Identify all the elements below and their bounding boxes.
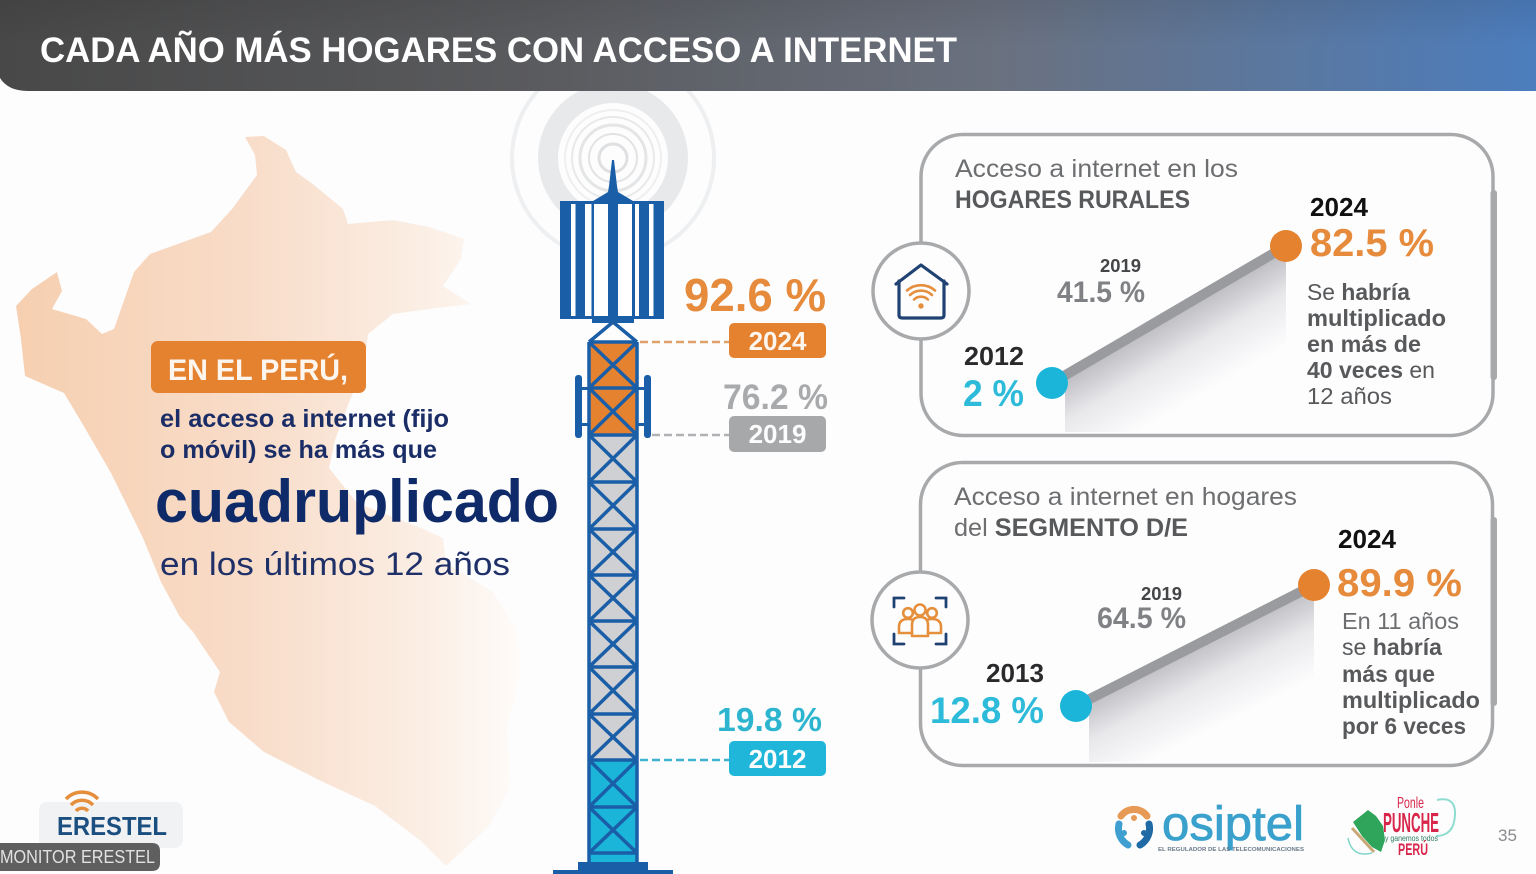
data 2019: 2019 — [1141, 583, 1182, 604]
card heading: Acceso a internet en los — [955, 155, 1238, 183]
rural note — [1307, 279, 1446, 409]
logo: Erestel: ERESTEL — [57, 811, 167, 841]
level marker 2019: 76.2 % — [723, 378, 828, 417]
level marker 2012: 2012 — [749, 744, 806, 774]
logo: Osiptel: osiptel — [1162, 798, 1304, 851]
panel: D/E segment households — [872, 462, 1497, 766]
icon: wifi house — [873, 243, 969, 339]
data 2012 — [963, 341, 1024, 414]
card heading: Acceso a internet en hogares — [954, 483, 1297, 511]
intro text line 2: o móvil) se ha más que — [160, 436, 437, 464]
level marker 2024: 92.6 % — [684, 269, 826, 321]
data 2019: 2019 — [1100, 255, 1141, 276]
badge: en el Perú — [151, 341, 366, 393]
card frame — [921, 134, 1497, 436]
data 2024: 89.9 % — [1337, 562, 1462, 605]
panel: rural households — [873, 134, 1497, 436]
badge: en el Perú: EN EL PERÚ, — [168, 353, 348, 387]
data 2013 — [930, 658, 1044, 731]
level marker 2012 — [640, 701, 826, 776]
intro text: el acceso a internet (fijo — [160, 405, 449, 433]
title: CADA AÑO MÁS HOGARES CON ACCESO A INTERNET — [40, 30, 957, 70]
signal rings — [512, 57, 714, 259]
level marker 2024 — [640, 269, 826, 358]
highlighted word: cuadruplicado — [155, 468, 559, 535]
tower lattice — [589, 342, 637, 864]
level marker 2019: 2019 — [749, 419, 806, 449]
data 2013: 12.8 % — [930, 690, 1044, 731]
card heading: del SEGMENTO D/E — [954, 514, 1188, 542]
data 2019 — [1097, 583, 1186, 635]
data 2024: 2024 — [1338, 524, 1397, 554]
data 2024 — [1337, 524, 1462, 605]
logo: Osiptel: EL REGULADOR DE LAS TELECOMUNICACIONES — [1158, 847, 1304, 853]
level marker 2012: 19.8 % — [717, 701, 822, 738]
viewer name tag: MONITOR ERESTEL — [0, 846, 155, 867]
data 2024: 82.5 % — [1310, 222, 1434, 265]
level marker 2019 — [652, 378, 828, 452]
data 2024: 2024 — [1310, 192, 1369, 222]
logo: Ponle Punche Perú: PUNCHE — [1383, 807, 1439, 838]
segment note: multiplicado — [1342, 687, 1480, 713]
segment note: se habría — [1342, 634, 1442, 660]
logo: Ponle Punche Perú: y ganemos todos — [1385, 834, 1438, 843]
rural note: en más de — [1307, 331, 1421, 357]
viewer name tag — [0, 843, 160, 871]
data 2019: 64.5 % — [1097, 602, 1186, 635]
data 2019 — [1057, 255, 1145, 309]
logo: Ponle Punche Perú — [1348, 795, 1455, 859]
level marker 2024: 2024 — [749, 326, 807, 356]
data 2024 — [1310, 192, 1434, 265]
tower base — [553, 862, 673, 874]
logo: Erestel — [39, 792, 183, 848]
trend chart — [1036, 230, 1302, 432]
rural note: multiplicado — [1307, 305, 1446, 331]
telecom tower — [553, 160, 673, 874]
card heading — [955, 155, 1238, 214]
logo: Ponle Punche Perú: Ponle — [1397, 795, 1424, 812]
left message block — [151, 341, 559, 582]
data 2012: 2012 — [964, 341, 1024, 371]
rural note: 12 años — [1307, 383, 1392, 409]
rural note: 40 veces en — [1307, 357, 1435, 383]
osiptel emblem — [1118, 809, 1150, 845]
card heading — [954, 483, 1297, 542]
card heading: HOGARES RURALES — [955, 186, 1190, 214]
map of Peru — [16, 136, 520, 866]
trend chart — [1060, 569, 1330, 762]
logo: Ponle Punche Perú: PERÚ — [1398, 840, 1428, 859]
closing text: en los últimos 12 años — [160, 546, 510, 582]
page number: 35 — [1498, 826, 1517, 845]
segment note: por 6 veces — [1342, 713, 1466, 739]
icon: people group — [872, 572, 968, 668]
segment note — [1342, 608, 1480, 739]
data 2019: 41.5 % — [1057, 276, 1145, 309]
tower fill levels — [589, 342, 637, 864]
tower top brace — [589, 322, 637, 342]
segment note: En 11 años — [1342, 608, 1459, 634]
antenna array — [560, 160, 664, 323]
rural note: Se habría — [1307, 279, 1410, 305]
card frame — [920, 462, 1497, 766]
data 2012: 2 % — [963, 373, 1024, 414]
data 2013: 2013 — [986, 658, 1044, 688]
segment note: más que — [1342, 661, 1435, 687]
side panels — [575, 375, 651, 438]
header bar — [0, 0, 1536, 91]
